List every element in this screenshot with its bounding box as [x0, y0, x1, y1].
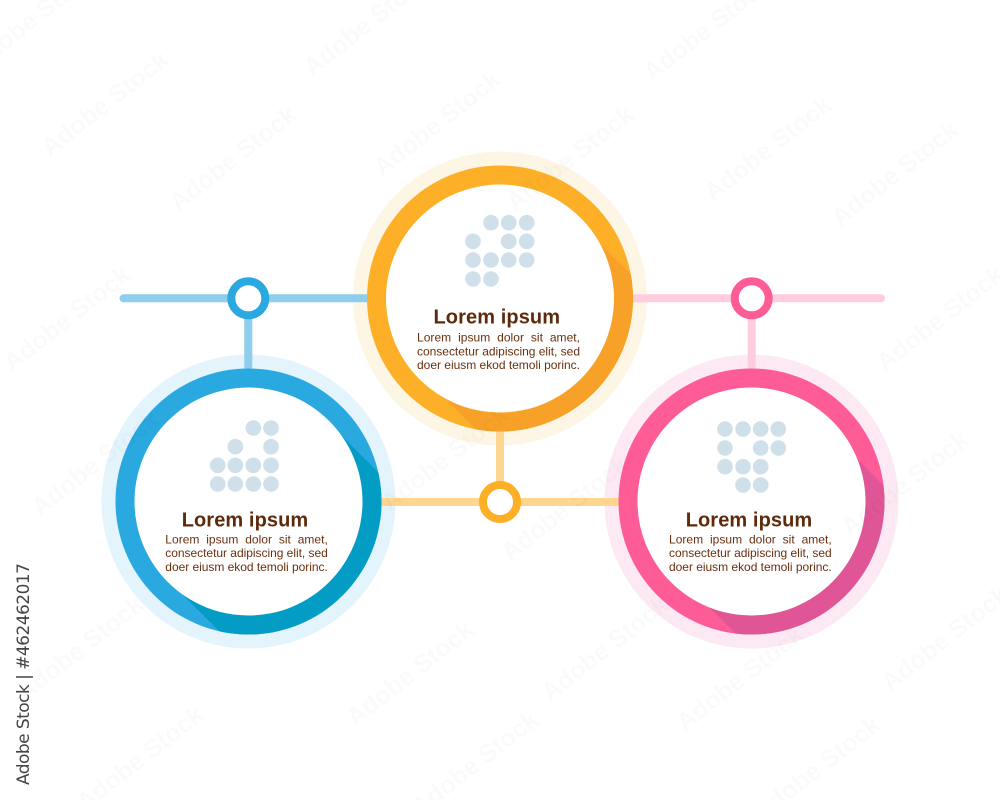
pink body text: Lorem ipsum dolor sit amet, [669, 532, 832, 546]
watermark pattern: Adobe Stock [376, 401, 514, 517]
side credit text: Adobe Stock | #462462017 [14, 563, 34, 785]
watermark pattern: Adobe Stock [164, 101, 302, 217]
watermark pattern: Adobe Stock [26, 406, 164, 522]
pink node [735, 281, 769, 315]
orange node [483, 485, 517, 519]
pink body text: doer eiusm ekod temoli porinc. [669, 560, 832, 574]
blue ring [116, 368, 382, 634]
watermark pattern: Adobe Stock [501, 101, 639, 217]
blue heading: Lorem ipsum [182, 510, 308, 532]
orange body text: doer eiusm ekod temoli porinc. [417, 358, 580, 372]
icon: orange dot glyph [465, 215, 534, 287]
panel: orange circle [353, 152, 647, 446]
blue halo [102, 354, 396, 648]
pink ring long shadow [710, 460, 884, 634]
watermark pattern: Adobe Stock [368, 66, 506, 182]
watermark pattern: Adobe Stock [496, 451, 634, 567]
blue body text [165, 532, 328, 574]
pink body text: consectetur adipiscing elit, sed [669, 546, 832, 560]
blue body text: doer eiusm ekod temoli porinc. [165, 560, 328, 574]
orange heading: Lorem ipsum [434, 306, 560, 328]
orange body text [417, 331, 580, 372]
watermark pattern: Adobe Stock [836, 426, 974, 542]
watermark pattern: Adobe Stock [826, 116, 964, 232]
orange ring long shadow [446, 244, 633, 432]
orange halo [353, 152, 647, 446]
pink heading: Lorem ipsum [686, 510, 812, 532]
panel: pink circle [604, 354, 898, 648]
icon: blue dot glyph [210, 420, 279, 492]
pink inner disc [638, 388, 866, 616]
icon: pink dot glyph [717, 421, 786, 493]
blue body text: consectetur adipiscing elit, sed [165, 546, 328, 560]
watermark pattern: Adobe Stock [0, 261, 136, 377]
pink ring [618, 368, 884, 634]
pink halo [604, 354, 898, 648]
panel: blue circle [102, 354, 396, 648]
watermark pattern: Adobe Stock [341, 616, 479, 732]
blue node [231, 281, 265, 315]
pink body text [669, 532, 832, 574]
orange inner disc [386, 184, 614, 412]
watermark pattern: Adobe Stock [536, 591, 674, 707]
blue inner disc [134, 388, 362, 616]
blue ring long shadow [182, 435, 382, 634]
connector: pink [633, 281, 885, 368]
watermark pattern: Adobe Stock [36, 46, 174, 162]
connector: orange [382, 432, 618, 519]
orange body text: Lorem ipsum dolor sit amet, [417, 331, 580, 345]
watermark pattern: Adobe Stock [671, 621, 809, 737]
watermark pattern: Adobe Stock [11, 591, 149, 707]
watermark pattern: Adobe Stock [699, 91, 837, 207]
connector: blue [120, 281, 367, 368]
blue body text: Lorem ipsum dolor sit amet, [165, 532, 328, 546]
orange ring [367, 166, 633, 432]
orange body text: consectetur adipiscing elit, sed [417, 345, 580, 359]
